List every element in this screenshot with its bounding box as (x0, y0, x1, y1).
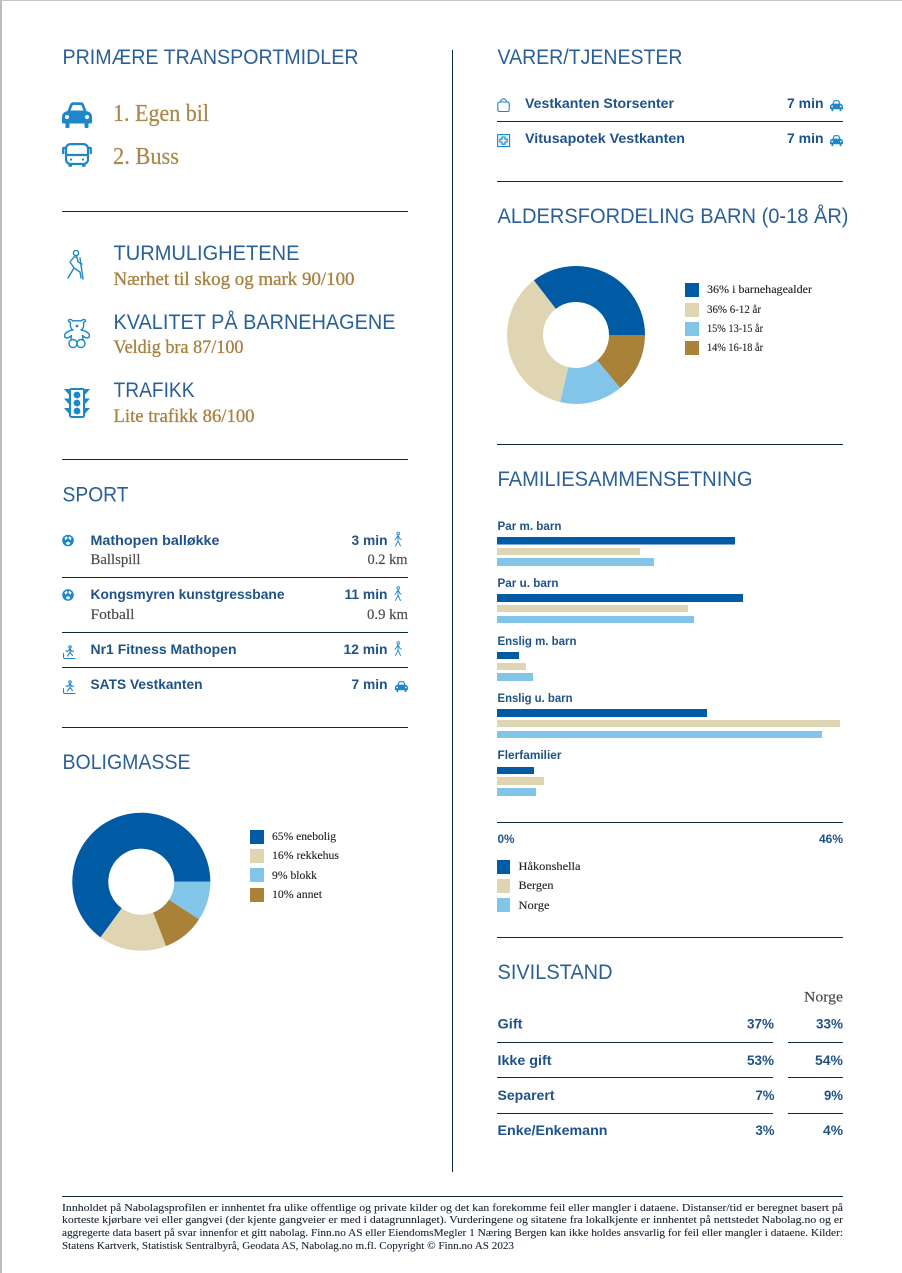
footer disclaimer: Statens Kartverk, Statistisk Sentralbyrå, Geodata AS, Nabolag.no m.fl. Copyright © Finn.no AS 2023 (62, 1241, 514, 1252)
text: time 2: 11 min (344, 586, 388, 602)
icon: car (830, 100, 843, 111)
panel: sport (62, 484, 409, 694)
icon: car (62, 102, 92, 128)
bar group: single with children: Enslig m. barn (498, 634, 576, 648)
row: widowed: Enke/Enkemann (498, 1122, 608, 1138)
icon: fitness (64, 646, 75, 658)
heading: kindergarten: KVALITET PÅ BARNEHAGENE (114, 311, 396, 334)
icon: walk (395, 587, 402, 600)
text: time 1: 3 min (352, 532, 388, 548)
footer disclaimer: aggregerte data basert på svar innenfor et gitt nabolag. Finn.no AS eller EiendomsMegler 1 Næring Bergen kan ikke holdes ansvarlig for feil eller mangler i dataene. Kilder: (62, 1228, 843, 1239)
bar group: couples without children: Par u. barn (498, 576, 558, 590)
text: time 4: 7 min (352, 676, 388, 692)
icon: ball (62, 535, 74, 546)
bar group: single with children (497, 634, 576, 681)
row: unmarried (498, 1052, 844, 1068)
bar group: single without children (497, 691, 840, 738)
text: shop: Vestkanten Storsenter (525, 95, 675, 111)
donut chart: child ages (507, 266, 645, 404)
heading: hiking: TURMULIGHETENE (114, 242, 300, 265)
axis label: maximum: 46% (819, 832, 843, 846)
row: married: Gift (498, 1016, 523, 1032)
icon: bus (63, 144, 91, 167)
bar group: couples with children: Par m. barn (498, 519, 562, 533)
icon: shopping bag (498, 99, 509, 112)
panel: primary transport (62, 46, 358, 170)
text: traffic score: Lite trafikk 86/100 (114, 407, 254, 427)
legend: family composition: Håkonshella (518, 860, 580, 873)
bar group: couples without children (497, 576, 743, 623)
text: pharmacy: Vitusapotek Vestkanten (525, 130, 685, 146)
row: separated (498, 1087, 844, 1103)
row: widowed: 4% (823, 1122, 844, 1138)
panel: child age distribution (498, 205, 848, 404)
legend: housing (250, 830, 340, 902)
legend: family composition: Bergen (518, 880, 554, 892)
legend: child ages: 15% 13-15 år (707, 322, 763, 335)
text: venue 2: Kongsmyren kunstgressbane (90, 586, 285, 602)
text: hiking score: Nærhet til skog og mark 90/100 (114, 270, 354, 290)
row: married (498, 1016, 844, 1032)
legend: child ages: 36% i barnehagealder (707, 284, 812, 296)
heading: goods and services: VARER/TJENESTER (498, 46, 682, 69)
row: married: 37% (747, 1016, 775, 1032)
icon: ball (62, 589, 74, 601)
row: unmarried: Ikke gift (498, 1052, 552, 1068)
row: separated: 9% (824, 1087, 844, 1103)
row: unmarried: 53% (747, 1052, 775, 1068)
legend: child ages (685, 283, 812, 355)
bar group: multi-family (497, 748, 562, 796)
legend: housing: 10% annet (272, 889, 323, 901)
text: own car: 1. Egen bil (113, 101, 209, 127)
text: distance 1: 0.2 km (368, 552, 408, 568)
legend: child ages: 36% 6-12 år (707, 303, 761, 316)
footer disclaimer: Innholdet på Nabolagsprofilen er innhentet fra ulike offentlige og private kilder og det kan forekomme feil eller mangler i dataene. Distanser/tid er beregnet basert på (62, 1203, 844, 1214)
heading: housing: BOLIGMASSE (62, 751, 190, 774)
heading: child age distribution: ALDERSFORDELING BARN (0-18 ÅR) (498, 205, 848, 228)
text: venue 1: Mathopen balløkke (90, 532, 220, 548)
heading: marital status: SIVILSTAND (498, 961, 612, 984)
panel: marital status (497, 961, 844, 1138)
column header: Norway: Norge (804, 990, 843, 1006)
text: distance 2: 0.9 km (367, 607, 409, 623)
bar group: single without children: Enslig u. barn (498, 691, 572, 705)
panel: goods and services (497, 46, 843, 147)
icon: teddy bear (65, 319, 89, 348)
panel: family composition (497, 468, 843, 912)
row: separated: Separert (498, 1087, 555, 1103)
text: pharmacy time: 7 min (787, 130, 824, 146)
footer disclaimer: korteste kjørbare vei eller gangvei (der kjente gangveier er med i datagrunnlaget). Vurderingene og sitatene fra lokalkjente er innhentet på nettstedet Nabolag.no og er (62, 1215, 844, 1226)
text: time 3: 12 min (344, 641, 388, 657)
panel: neighbourhood ratings (64, 242, 396, 427)
icon: walk (395, 532, 402, 546)
text: kindergarten score: Veldig bra 87/100 (114, 338, 244, 358)
footer disclaimer (62, 1203, 844, 1252)
icon: pharmacy cross (498, 135, 510, 147)
text: venue 4: SATS Vestkanten (90, 676, 202, 692)
heading: primary transport: PRIMÆRE TRANSPORTMIDLER (62, 46, 358, 69)
heading: traffic: TRAFIKK (114, 379, 194, 402)
text: activity 1: Ballspill (90, 552, 140, 568)
text: bus: 2. Buss (113, 144, 179, 170)
row: widowed (498, 1122, 844, 1138)
donut chart: housing (72, 813, 210, 951)
legend: housing: 65% enebolig (272, 831, 336, 843)
row: married: 33% (816, 1016, 844, 1032)
legend: housing: 9% blokk (272, 870, 317, 882)
icon: hiker (68, 250, 83, 279)
legend: housing: 16% rekkehus (272, 850, 340, 862)
text: shop time: 7 min (787, 95, 824, 111)
row: unmarried: 54% (815, 1052, 844, 1068)
icon: car (395, 681, 408, 692)
legend: child ages: 14% 16-18 år (707, 341, 763, 354)
row: separated: 7% (756, 1087, 775, 1103)
text: venue 3: Nr1 Fitness Mathopen (90, 641, 236, 657)
legend: family composition: Norge (518, 900, 550, 912)
text: activity 2: Fotball (90, 607, 134, 623)
heading: sport: SPORT (62, 484, 129, 506)
row: widowed: 3% (756, 1122, 775, 1138)
icon: traffic light (64, 389, 90, 417)
bar group: multi-family: Flerfamilier (498, 748, 562, 762)
icon: walk (395, 642, 402, 656)
axis label: minimum: 0% (498, 832, 515, 846)
panel: housing (62, 751, 340, 951)
icon: fitness (64, 681, 75, 694)
icon: car (830, 135, 843, 146)
legend: family composition (497, 860, 580, 912)
heading: family composition: FAMILIESAMMENSETNING (498, 468, 752, 491)
bar group: couples with children (497, 519, 735, 566)
